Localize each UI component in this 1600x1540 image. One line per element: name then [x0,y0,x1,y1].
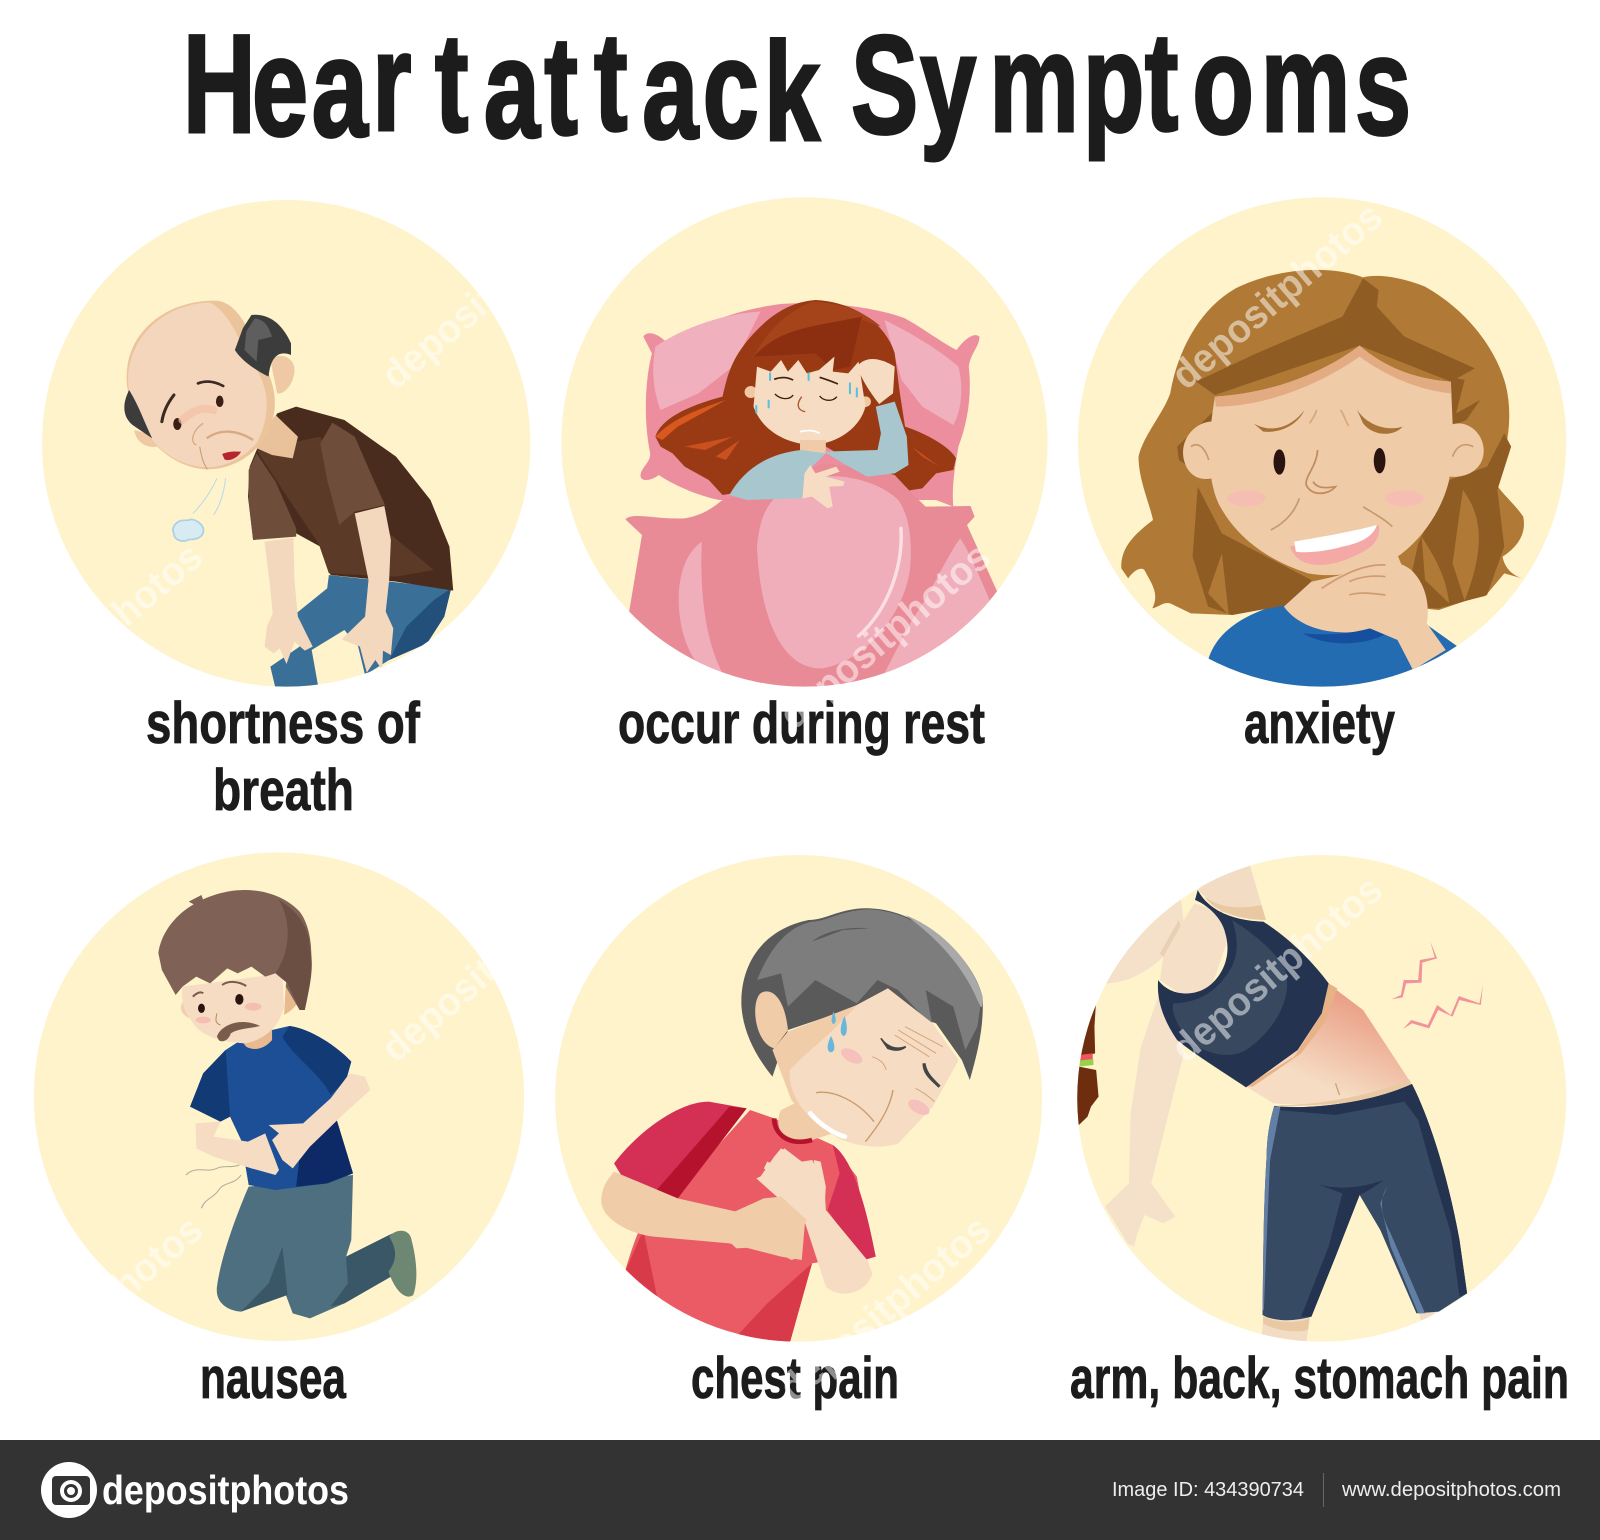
hair shadows [1193,487,1311,615]
neck [1284,556,1402,632]
shirt [1208,605,1457,687]
pain zigzag [1391,942,1437,999]
hair [235,315,291,377]
illustration: anxious woman biting finger [1078,197,1566,687]
arm right [342,506,393,673]
cheeks [1227,490,1266,506]
neck [800,440,826,453]
hand on head [857,359,895,404]
label: occur during rest: occur during rest [618,691,985,756]
belly [1246,987,1411,1107]
panel: anxiety [1078,197,1566,756]
jeans [270,575,451,688]
face [1209,346,1453,575]
fringe [1196,278,1475,395]
panel: occur during rest [561,197,1048,756]
watermarks: depositphotos [771,534,999,738]
ear [270,356,294,393]
nose [1306,450,1336,493]
watermarks: depositphotos [1163,867,1391,1071]
moustache [217,1022,260,1041]
hand lower [729,1197,807,1260]
illustration: bald man bent over, short of breath [42,200,530,687]
wrinkles [1271,498,1392,530]
face details [235,994,243,1005]
sleeve arm up [824,402,908,477]
neck [778,1100,833,1140]
neck [253,415,298,458]
pain lines [186,1165,241,1208]
trousers [217,1175,399,1318]
logo wordmark: depositphotos [102,1467,349,1513]
title: Heartattack Symptoms [183,4,1411,170]
watermarks: depositphotos [373,867,601,1071]
wrinkles [872,1027,943,1102]
divider [1323,1473,1324,1507]
hair [741,908,983,1080]
label: nausea: nausea [200,1346,347,1411]
hair [1074,1000,1099,1127]
face [198,382,223,386]
eyes [1274,449,1285,475]
top [1158,890,1329,1087]
legs shorts skin [1261,1310,1439,1343]
hair [158,890,311,1010]
arm right [269,1073,370,1168]
neck [241,1027,272,1049]
image id: Image ID: 434390734 [1112,1479,1304,1501]
ears [744,386,756,398]
hair back [1121,270,1524,615]
shoe [388,1231,416,1297]
illustration: woman sick in bed [561,197,1048,687]
footer bar [0,1440,1600,1540]
ears [1183,422,1212,479]
label: shortness of breath: breath [213,758,354,823]
other arm [760,1148,872,1294]
brows [1254,410,1305,432]
shirt [248,407,453,591]
hand upper [756,1148,826,1223]
illustration: woman side-bending with back pain [1060,840,1600,1360]
label: chest pain: chest pain [691,1346,899,1411]
arm left [196,1122,279,1175]
face [182,973,284,1043]
mouth [1290,525,1379,565]
torso skin [1160,903,1229,997]
hair [655,300,956,495]
shoulder top [1198,863,1266,920]
label: anxiety: anxiety [1244,691,1395,756]
watermarks: depositphotos [373,194,601,398]
panel: arm, back, stomach pain [1060,840,1600,1411]
upper arm [1105,897,1184,983]
shirt [624,1110,871,1343]
illustration: kneeling man holding stomach [0,840,540,1360]
face [772,988,958,1146]
navel [1336,1083,1340,1095]
head [127,301,275,469]
blanket [626,474,997,687]
sleeve arm low [729,450,826,500]
pillow [641,303,979,507]
watermarks [0,194,1391,1411]
panel: shortness of breath [42,200,530,811]
mouth [816,1090,893,1142]
hand [1370,564,1446,670]
label: shortness of breath [146,691,421,823]
panel: chest pain [540,840,1080,1411]
arm left [264,538,313,664]
face [754,357,865,445]
breath [173,519,203,541]
ear [284,976,304,1015]
illustration: grey-haired man holding chest [540,840,1080,1360]
ear [755,991,788,1048]
watermarks: depositphotos [771,1207,999,1411]
label: shortness of breath: shortness of [146,691,421,756]
watermarks: depositphotos [1163,194,1391,398]
website: www.depositphotos.com [1341,1479,1561,1501]
long arm [1105,997,1184,1247]
hand on chest [802,465,845,508]
shorts [1263,1084,1467,1320]
shirt [190,1026,353,1190]
arm [601,1172,805,1260]
logo: camera icon [41,1462,97,1518]
panel: nausea [0,840,540,1411]
sweat [828,1012,847,1052]
eyes [881,1038,906,1050]
